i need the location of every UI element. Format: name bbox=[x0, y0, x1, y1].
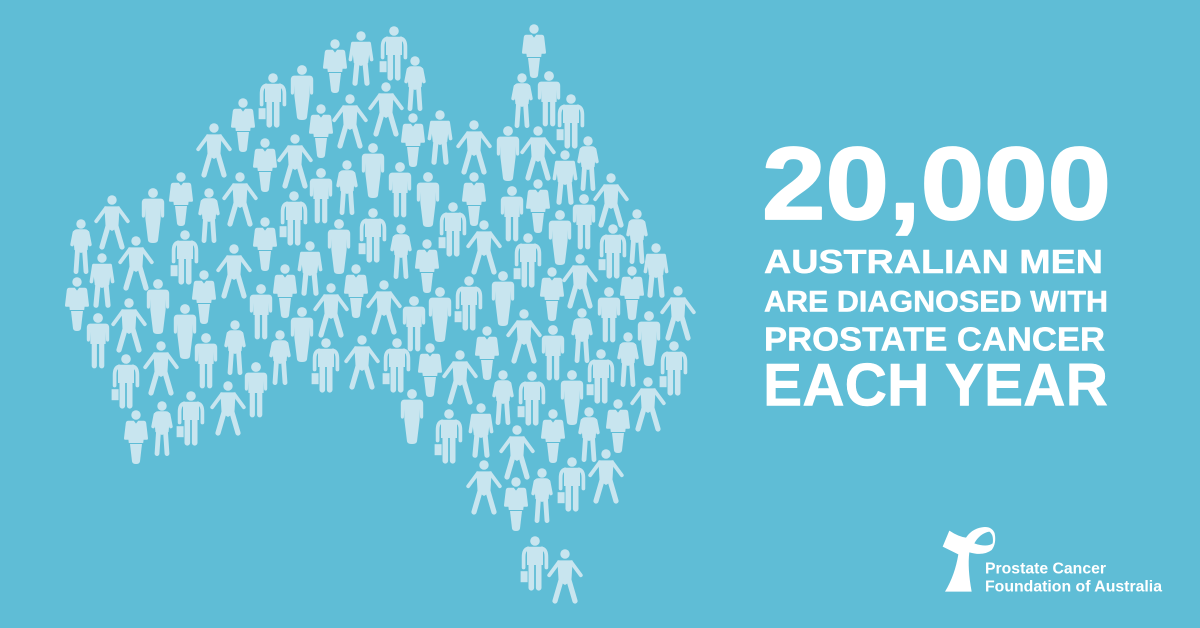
text block: australian men are diagnosed with prostate cancer each year: PROSTATE CANCER bbox=[764, 321, 1105, 358]
map of Australia made of people pictograms bbox=[65, 24, 694, 601]
text block: australian men are diagnosed with prostate cancer each year: ARE DIAGNOSED WITH bbox=[764, 286, 1108, 318]
text block: australian men are diagnosed with prostate cancer each year: AUSTRALIAN MEN bbox=[764, 244, 1103, 281]
icon: ribbon bbox=[943, 527, 995, 592]
text block: australian men are diagnosed with prostate cancer each year: EACH YEAR bbox=[763, 352, 1108, 419]
headline statistic: 20,000 bbox=[762, 126, 1111, 241]
logo wordmark bbox=[985, 560, 1162, 596]
text block: australian men are diagnosed with prostate cancer each year bbox=[763, 244, 1108, 419]
logo: Prostate Cancer Foundation of Australia bbox=[943, 527, 1162, 596]
logo wordmark: Prostate Cancer bbox=[985, 560, 1106, 578]
logo wordmark: Foundation of Australia bbox=[985, 578, 1162, 596]
